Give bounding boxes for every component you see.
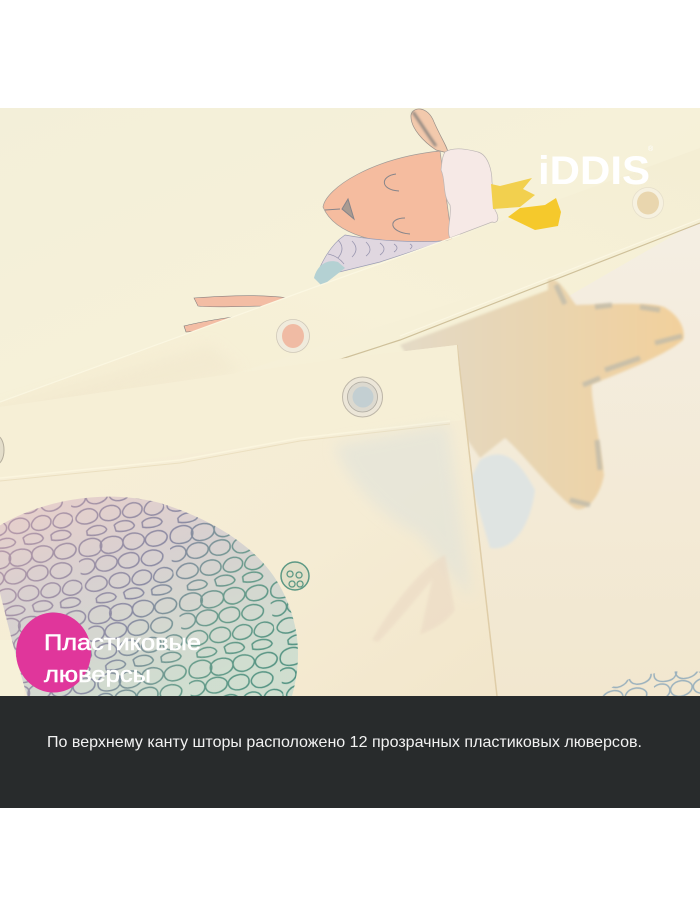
- wool small tail: [281, 562, 309, 590]
- grommet: centre with pink print showing: [276, 320, 310, 352]
- left bottom cream sliver: [0, 640, 24, 696]
- knitted wool sheep body: [0, 480, 320, 700]
- grommet hole: [282, 324, 304, 348]
- starfish shape seen through curtain: [400, 279, 684, 548]
- second wool sheep, bottom right: [595, 660, 700, 700]
- diagonal top hem of curtain: [31, 219, 700, 400]
- grommet inner rim: [348, 382, 378, 412]
- sheep eyes and nose: [325, 174, 410, 234]
- wool loops: [0, 480, 320, 700]
- sheep head: [323, 151, 452, 244]
- front curtain panel: [0, 345, 497, 696]
- heading: plastic grommets: Пластиковые: [44, 630, 201, 655]
- yellow chick above hem: [508, 198, 561, 230]
- dark caption panel: [0, 696, 700, 808]
- grommet hole: [637, 192, 659, 214]
- yellow crown: [491, 178, 535, 209]
- logo wordmark: iDDIS: [538, 149, 650, 193]
- wool tint: [0, 497, 298, 696]
- panel right folded edge: [457, 345, 497, 696]
- faint sheep leg through panel: [372, 555, 455, 642]
- blue shadow through panel: [335, 424, 472, 600]
- grommet: front panel: [342, 377, 382, 417]
- caption background: [0, 696, 700, 808]
- lower right translucent curtain area: [468, 224, 700, 696]
- upper curtain fabric: [0, 108, 700, 408]
- printed sheep on curtain: [184, 109, 535, 332]
- logo: IDDIS: [538, 145, 654, 193]
- grommet ring: [342, 377, 382, 417]
- scarf knit: [320, 234, 444, 272]
- panel fabric: [0, 345, 497, 696]
- sheep scarf: [314, 235, 444, 286]
- panel top reinforced hem: [340, 345, 459, 368]
- hem seam: [0, 443, 274, 478]
- grommet: left edge: [0, 436, 4, 464]
- star grey texture marks: [556, 285, 682, 505]
- registered mark: ®: [648, 145, 654, 153]
- product photo: shower curtain with grommets: [0, 108, 700, 700]
- soft shade on hem: [0, 345, 240, 430]
- heading: plastic grommets: люверсы: [44, 662, 151, 687]
- hem stitch light: [400, 219, 700, 336]
- hem band: [195, 220, 700, 332]
- sheep ear: [411, 109, 448, 153]
- blue sheep body through fabric: [470, 454, 535, 548]
- small wool patch: [595, 660, 700, 700]
- sheep lower leg: [184, 316, 232, 332]
- caption text: По верхнему канту шторы расположено 12 прозрачных пластиковых люверсов.: [47, 734, 642, 751]
- grommet: far right: [632, 188, 664, 218]
- sheep leg: [194, 296, 288, 307]
- hem fold highlight: [0, 235, 460, 402]
- grommet hole: [352, 386, 374, 408]
- sheep fleece tuft: [441, 149, 498, 238]
- grommet ring: [632, 188, 664, 218]
- hem seam shade: [0, 424, 450, 481]
- scarf blue end: [314, 261, 345, 286]
- hem stitched edge: [332, 223, 700, 362]
- infographic canvas: [0, 108, 700, 808]
- ear inner shade: [413, 112, 436, 146]
- star body: [400, 279, 684, 509]
- grommet ring: [276, 320, 310, 352]
- pink highlight circle: [16, 612, 91, 692]
- scarf loops: [328, 240, 412, 264]
